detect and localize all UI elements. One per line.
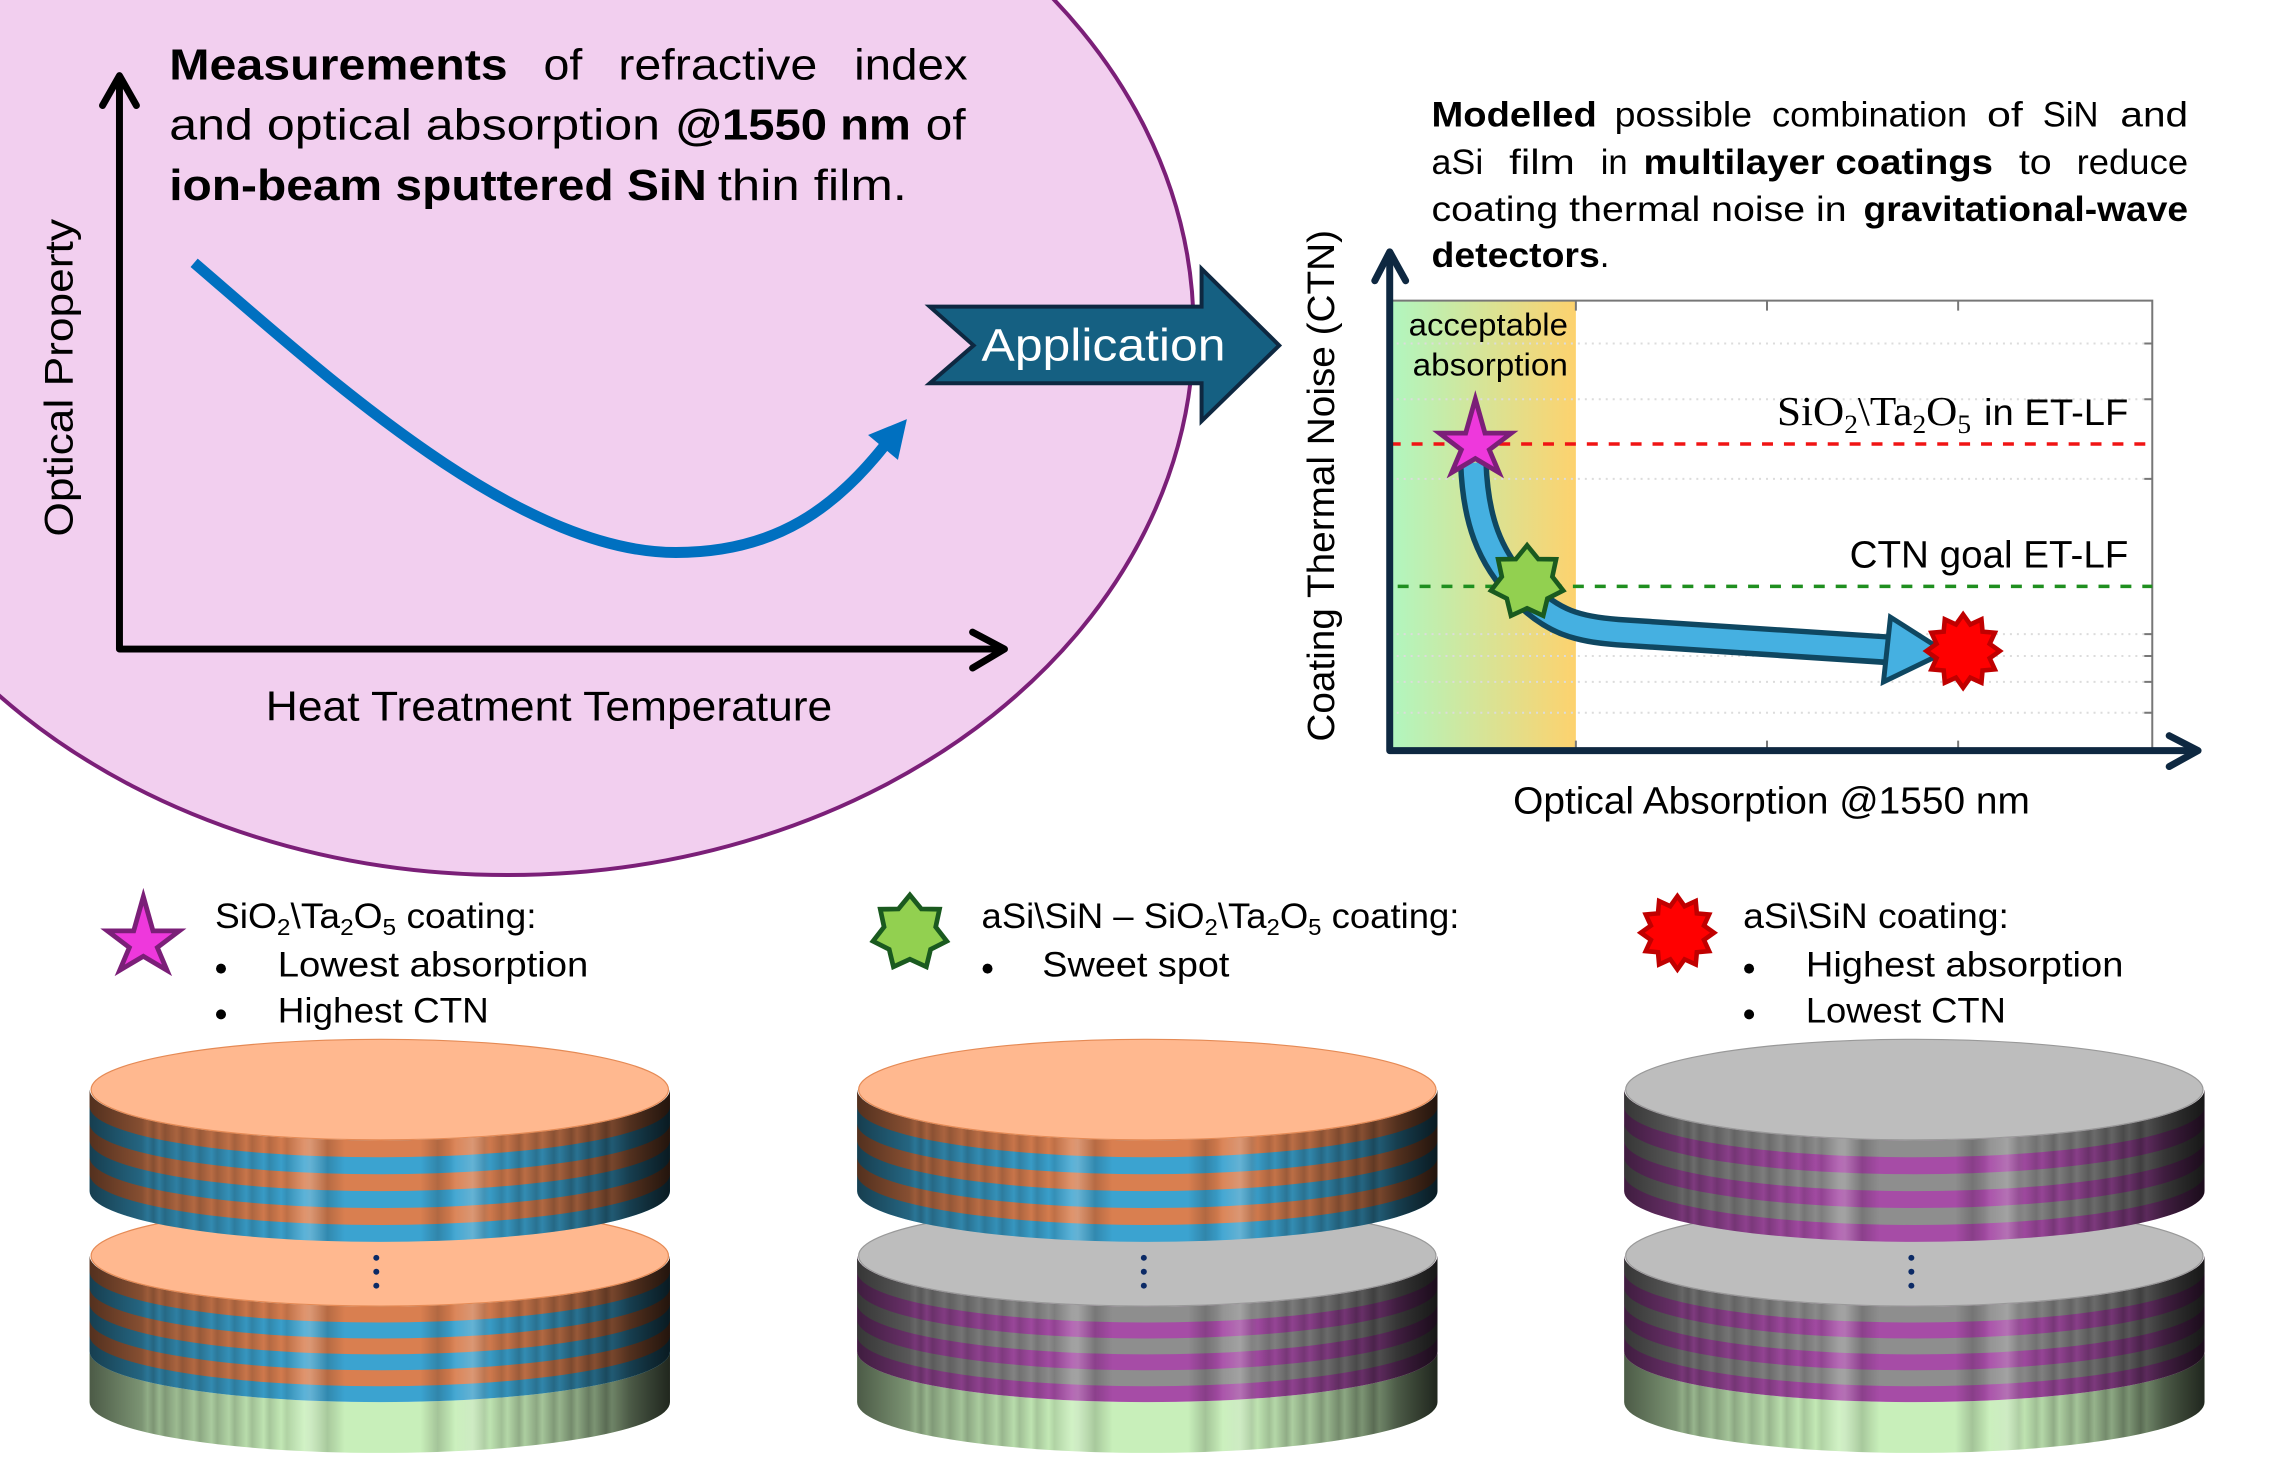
arrow: application: Application <box>982 319 1225 370</box>
label: SiO2/Ta2O5 in ET-LF: in ET-LF <box>1984 392 2128 433</box>
label: SiO2/Ta2O5 in ET-LF: O <box>1926 389 1957 434</box>
legend: mixed coating: O <box>1280 897 1308 936</box>
text block: modelled combination: of <box>1987 95 2023 134</box>
marker: green star <box>1491 545 1563 616</box>
label: SiO2/Ta2O5 in ET-LF: 2 <box>1844 410 1858 439</box>
label: CTN goal ET-LF: CTN goal ET-LF <box>1850 534 2128 576</box>
text block: modelled combination: . <box>1600 236 1609 275</box>
text block: modelled combination: gravitational-wave <box>1864 190 2188 229</box>
arrow: trade-off path <box>1473 463 1945 682</box>
heading: measurements text: thin film. <box>718 161 907 210</box>
text block: modelled combination: in <box>1601 143 1628 182</box>
label: SiO2/Ta2O5 in ET-LF: SiO <box>1777 389 1840 434</box>
icon: legend green star <box>873 895 947 967</box>
marker: magenta star <box>1439 399 1511 473</box>
icon: legend red star <box>1641 896 1714 969</box>
heading: measurements text: index <box>854 41 968 90</box>
legend: SiO2/Ta2O5 coating <box>215 897 588 1030</box>
chart: coating thermal noise vs absorption <box>1375 252 2198 767</box>
legend: mixed coating <box>982 897 1459 985</box>
text block: modelled combination: combination <box>1772 95 1967 134</box>
label: acceptable absorption: absorption <box>1413 346 1568 382</box>
legend: SiO2/Ta2O5 coating: 2 <box>277 914 291 940</box>
axis label: optical property: Optical Property <box>38 219 82 537</box>
text block: modelled combination: and <box>2120 95 2188 134</box>
legend: aSi/SiN coating: aSi\SiN coating: <box>1743 897 2009 936</box>
line: SiO2/Ta2O5 level <box>1390 442 2152 446</box>
label: SiO2/Ta2O5 in ET-LF: 2 <box>1912 410 1926 439</box>
stack: aSi/SiN coating on substrate <box>1624 1039 2205 1453</box>
heading: measurements text: refractive <box>618 41 817 90</box>
label: SiO2/Ta2O5 in ET-LF: 5 <box>1957 410 1971 439</box>
heading: measurements text: of <box>926 100 967 149</box>
legend: mixed coating: 5 <box>1308 914 1322 940</box>
legend: SiO2/Ta2O5 coating: Highest CTN <box>278 991 489 1030</box>
text block: modelled combination: aSi <box>1432 143 1483 182</box>
text block: modelled combination: film <box>1509 143 1575 182</box>
stack: mixed coating on substrate <box>857 1039 1438 1453</box>
legend: SiO2/Ta2O5 coating: Lowest absorption <box>278 946 588 985</box>
text block: modelled combination: SiN <box>2043 95 2099 134</box>
label: acceptable absorption <box>1409 306 1568 382</box>
text block: modelled combination: multilayer coatings <box>1644 143 1993 182</box>
heading: measurements text <box>169 41 968 210</box>
axis label: optical absorption: Optical Absorption @1550 nm <box>1513 780 2030 822</box>
legend: SiO2/Ta2O5 coating: SiO <box>215 897 273 936</box>
label: SiO2/Ta2O5 in ET-LF <box>1777 389 2128 439</box>
heading: measurements text: and optical absorption <box>169 100 660 149</box>
legend: mixed coating: Sweet spot <box>1042 946 1230 985</box>
axis label: heat treatment temperature: Heat Treatment Temperature <box>266 683 832 730</box>
text block: modelled combination: to <box>2019 143 2052 182</box>
icon: legend magenta star <box>107 897 179 970</box>
curve: property vs temperature arrow <box>194 263 907 553</box>
legend: mixed coating: 2 <box>1266 914 1280 940</box>
line: CTN goal level <box>1398 585 2152 588</box>
arrow: application <box>930 269 1279 421</box>
text block: modelled combination: coating thermal noise in <box>1432 190 1847 229</box>
text block: modelled combination: reduce <box>2077 143 2188 182</box>
legend: SiO2/Ta2O5 coating: 5 <box>383 914 396 940</box>
legend: mixed coating: \Ta <box>1218 897 1267 936</box>
legend: SiO2/Ta2O5 coating: O <box>354 897 383 936</box>
text block: modelled combination: possible <box>1615 95 1752 134</box>
heading: measurements text: Measurements <box>169 41 508 90</box>
label: acceptable absorption: acceptable <box>1409 306 1568 342</box>
text block: modelled combination: Modelled <box>1432 95 1597 134</box>
text block: modelled combination: detectors <box>1432 236 1600 275</box>
legend: aSi/SiN coating: Lowest CTN <box>1806 991 2006 1030</box>
heading: measurements text: ion-beam sputtered SiN <box>169 161 707 210</box>
legend: aSi/SiN coating <box>1743 897 2123 1030</box>
label: SiO2/Ta2O5 in ET-LF: \Ta <box>1858 389 1912 434</box>
heading: measurements text: @1550 nm <box>676 100 911 149</box>
stack: SiO2/Ta2O5 coating on substrate <box>90 1039 670 1453</box>
marker: red star <box>1926 614 2000 688</box>
legend: mixed coating: coating: <box>1322 897 1459 936</box>
legend: SiO2/Ta2O5 coating: coating: <box>396 897 537 936</box>
axis label: coating thermal noise: Coating Thermal Noise (CTN) <box>1301 230 1343 742</box>
legend: mixed coating: aSi\SiN – SiO <box>982 897 1194 936</box>
chart: optical property vs heat treatment axes <box>103 76 1004 668</box>
legend: SiO2/Ta2O5 coating: 2 <box>340 914 354 940</box>
axes <box>1375 252 2198 767</box>
acceptable absorption band <box>1390 301 1576 749</box>
panel: measurements ellipse <box>0 0 1194 875</box>
heading: measurements text: of <box>544 41 583 90</box>
text block: modelled combination <box>1432 95 2188 275</box>
legend: mixed coating: 2 <box>1205 914 1218 940</box>
legend: aSi/SiN coating: Highest absorption <box>1806 946 2123 985</box>
legend: SiO2/Ta2O5 coating: \Ta <box>291 897 341 936</box>
